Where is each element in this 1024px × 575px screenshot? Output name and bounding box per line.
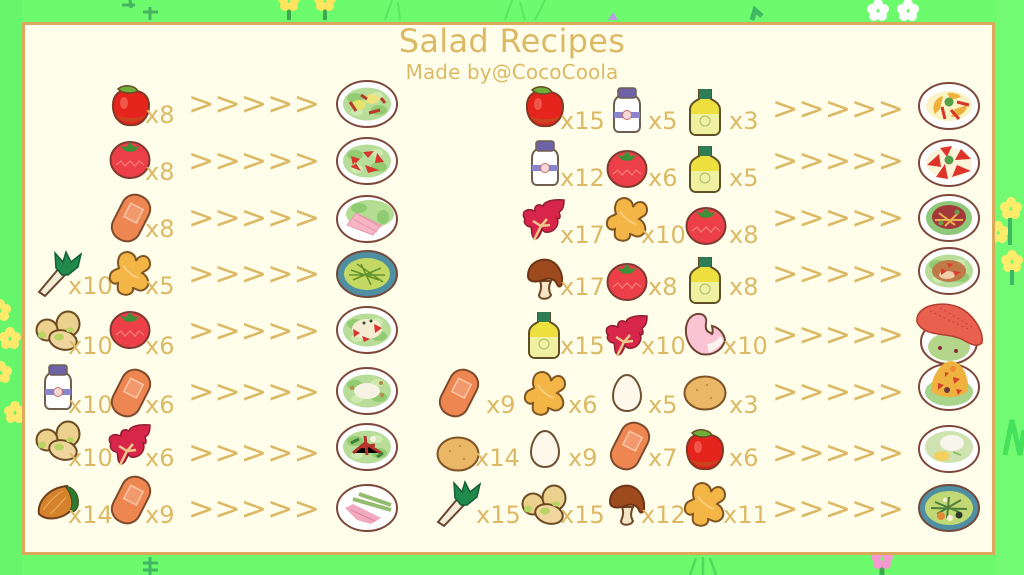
icon: tomato [686, 208, 726, 244]
salad plate: leek salad on blue plate [337, 251, 397, 297]
arrows: >>>>> [772, 374, 904, 410]
arrows: >>>>> [772, 143, 904, 179]
arrows: >>>>> [188, 435, 320, 471]
arrows: >>>>> [772, 256, 904, 292]
icon: leek [39, 252, 81, 296]
quantity: x8 [145, 101, 174, 129]
salad plate: salmon fillet salad [917, 304, 982, 364]
right recipe row 5 [529, 304, 982, 364]
right recipe row 8 [438, 482, 979, 531]
quantity: x15 [560, 107, 605, 135]
right recipe row 2 [532, 140, 979, 192]
quantity: x5 [648, 391, 677, 419]
right recipe row 4 [528, 248, 979, 303]
right recipe row 3 [523, 195, 979, 249]
quantity: x6 [145, 391, 174, 419]
salad plate: mixed salad on blue plate [919, 485, 979, 531]
quantity: x8 [729, 221, 758, 249]
quantity: x6 [145, 444, 174, 472]
icon: egg [613, 375, 641, 411]
quantity: x9 [568, 444, 597, 472]
icon: garlic bulbs [522, 486, 566, 527]
title: Salad Recipes [399, 22, 625, 60]
quantity: x15 [560, 501, 605, 529]
salad plate: red leaf ginger salad [919, 195, 979, 241]
quantity: x10 [68, 444, 113, 472]
icon: tomato [608, 264, 646, 300]
icon: tomato [110, 142, 150, 178]
quantity: x10 [723, 332, 768, 360]
left recipe row 8 [39, 472, 397, 531]
icon: mushroom [528, 260, 562, 299]
quantity: x10 [68, 332, 113, 360]
quantity: x9 [145, 501, 174, 529]
arrows: >>>>> [188, 256, 320, 292]
arrows: >>>>> [772, 317, 904, 353]
icon: milk bottle [532, 141, 558, 185]
icon: oil bottle [690, 257, 720, 303]
icon: red leaf [606, 316, 647, 356]
right recipe row 7 [438, 418, 979, 474]
quantity: x15 [476, 501, 521, 529]
icon: pink bean [686, 314, 725, 354]
salad plate: tomato garlic salad [337, 307, 397, 353]
icon: sausage [107, 365, 155, 421]
icon: ginger [110, 252, 150, 295]
right recipe row 1 [527, 83, 979, 135]
icon: oil bottle [690, 146, 720, 192]
quantity: x6 [729, 444, 758, 472]
icon: red leaf [109, 425, 150, 465]
quantity: x8 [648, 273, 677, 301]
salad plate: apple caprese [919, 83, 979, 129]
salad plate: red leaf salad [337, 424, 397, 470]
arrows: >>>>> [188, 143, 320, 179]
quantity: x10 [641, 332, 686, 360]
quantity: x3 [729, 391, 758, 419]
arrows: >>>>> [772, 491, 904, 527]
quantity: x10 [68, 272, 113, 300]
left recipe row 5 [36, 307, 397, 360]
right recipe row 6 [435, 361, 979, 421]
icon: oil bottle [690, 89, 720, 135]
quantity: x11 [723, 501, 768, 529]
quantity: x3 [729, 107, 758, 135]
icon: ginger [607, 198, 647, 241]
icon: apple [687, 430, 723, 469]
quantity: x6 [568, 391, 597, 419]
icon: milk bottle [45, 365, 71, 409]
left recipe row 7 [36, 422, 397, 472]
salad plate: potato egg salad [919, 426, 979, 472]
icon: ginger [685, 483, 725, 526]
left recipe row 4 [39, 251, 397, 300]
left recipe row 2 [110, 138, 397, 186]
icon: egg [531, 431, 559, 467]
quantity: x6 [648, 164, 677, 192]
quantity: x12 [560, 164, 605, 192]
salad plate: ham and asparagus salad [337, 485, 397, 531]
salad plate: mushroom salad [919, 248, 979, 294]
subtitle: author credit: Made by@CocoCoola [406, 60, 618, 84]
quantity: x5 [145, 272, 174, 300]
icon: oil bottle [529, 312, 559, 358]
icon: leek [438, 482, 480, 526]
quantity: x14 [475, 444, 520, 472]
quantity: x17 [560, 273, 605, 301]
salad plate: ham salad [337, 196, 397, 242]
salad plate: caesar salad [337, 368, 397, 414]
quantity: x10 [68, 391, 113, 419]
left recipe row 3 [107, 190, 397, 246]
quantity: x14 [68, 501, 113, 529]
quantity: x8 [145, 158, 174, 186]
quantity: x6 [145, 332, 174, 360]
icon: sausage [107, 472, 155, 528]
salad plate: tomato salad [337, 138, 397, 184]
salad plate: tomato caprese [919, 140, 979, 186]
arrows: >>>>> [772, 91, 904, 127]
quantity: x12 [641, 501, 686, 529]
icon: garlic bulbs [36, 422, 80, 463]
icon: mushroom [610, 486, 644, 525]
arrows: >>>>> [772, 435, 904, 471]
quantity: x17 [560, 221, 605, 249]
icon: tomato [110, 312, 150, 348]
salad plate: egg potato salad [919, 361, 979, 410]
arrows: >>>>> [188, 313, 320, 349]
arrows: >>>>> [188, 200, 320, 236]
quantity: x8 [729, 273, 758, 301]
icon: potato [438, 438, 478, 470]
icon: apple [527, 87, 563, 126]
quantity: x5 [729, 164, 758, 192]
icon: sausage [107, 190, 155, 246]
icon: garlic bulbs [36, 312, 80, 353]
icon: red leaf [523, 200, 564, 240]
icon: ginger [525, 372, 565, 415]
quantity: x10 [641, 221, 686, 249]
quantity: x8 [145, 215, 174, 243]
left recipe row 1 [113, 81, 397, 129]
quantity: x7 [648, 444, 677, 472]
icon: nut [39, 486, 78, 518]
icon: apple [113, 86, 149, 125]
icon: sausage [606, 418, 654, 474]
icon: tomato [608, 151, 646, 187]
icon: milk bottle [614, 88, 640, 132]
arrows: >>>>> [188, 86, 320, 122]
icon: sausage [435, 365, 483, 421]
icon: potato [684, 376, 726, 410]
salad plate: apple salad [337, 81, 397, 127]
quantity: x5 [648, 107, 677, 135]
arrows: >>>>> [772, 200, 904, 236]
arrows: >>>>> [188, 491, 320, 527]
quantity: x9 [486, 391, 515, 419]
quantity: x15 [560, 332, 605, 360]
arrows: >>>>> [188, 374, 320, 410]
left recipe row 6 [45, 365, 397, 421]
